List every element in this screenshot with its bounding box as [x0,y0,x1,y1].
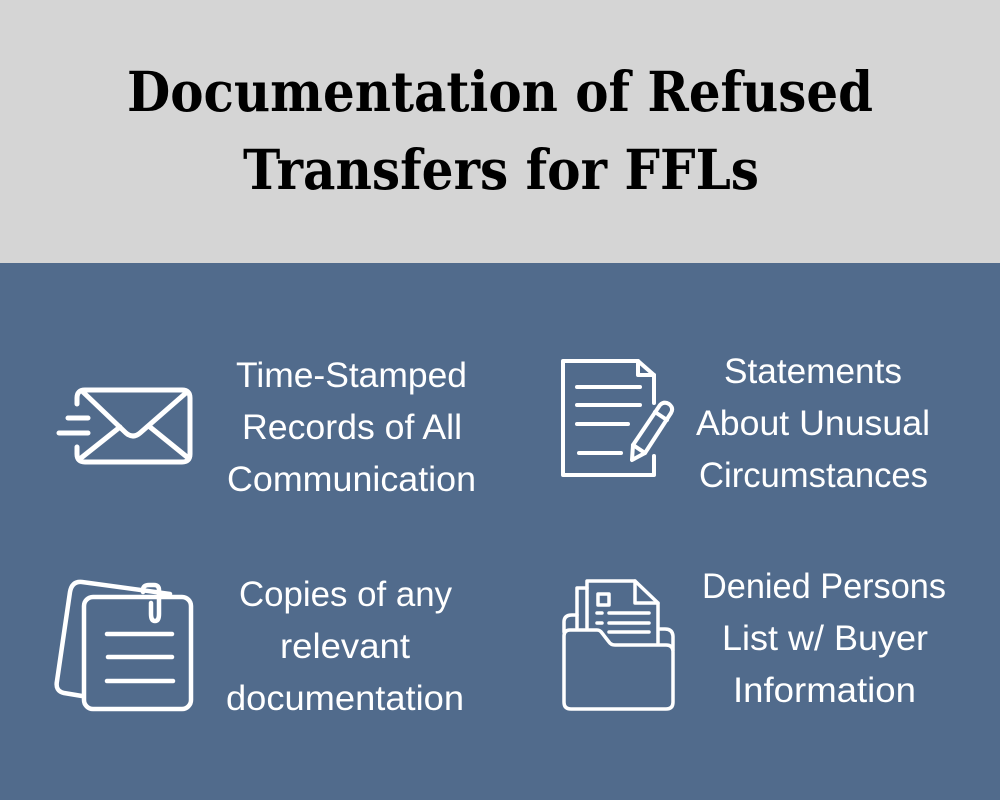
text: copies of documentation: documentation [226,679,464,718]
icon: document with pencil [563,361,672,475]
text: time-stamped records [227,356,476,499]
text: denied persons list: Denied Persons [702,567,946,606]
text: statements about unusual circumstances: About Unusual [696,404,930,443]
main panel background [0,263,1000,800]
text: denied persons list [702,567,946,710]
text: statements about unusual circumstances [696,352,930,495]
text: copies of documentation: Copies of any [239,575,452,614]
text: statements about unusual circumstances: Circumstances [699,456,928,495]
title [127,59,873,202]
icon: envelope with motion lines [59,390,190,462]
text: statements about unusual circumstances: Statements [724,352,902,391]
text: denied persons list: Information [733,671,916,710]
text: copies of documentation [226,575,464,718]
title: Documentation of Refused [127,59,873,124]
text: time-stamped records: Time-Stamped [236,356,467,395]
text: time-stamped records: Communication [227,460,476,499]
icon: folder with papers [564,581,673,709]
text: time-stamped records: Records of All [242,408,462,447]
title: Transfers for FFLs [243,137,759,202]
header band [0,0,1000,263]
text: denied persons list: List w/ Buyer [722,619,928,658]
text: copies of documentation: relevant [280,627,410,666]
icon: clipped notes [57,582,191,709]
